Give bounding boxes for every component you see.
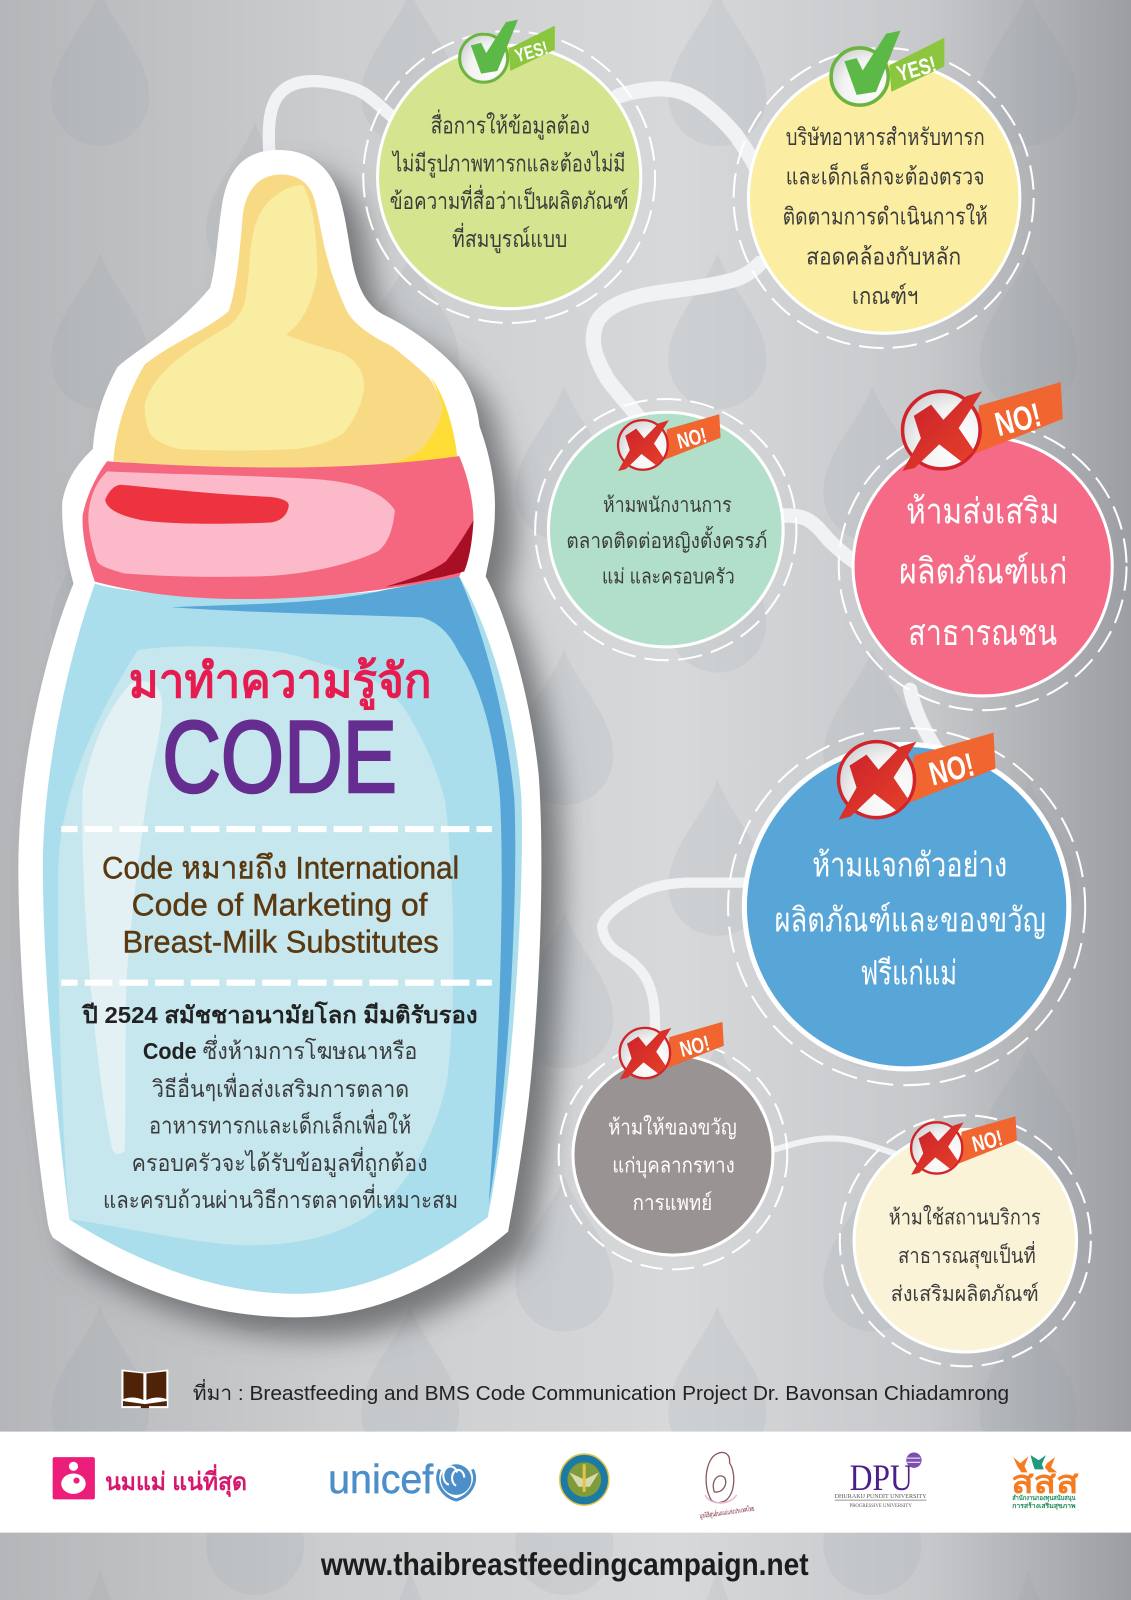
logo: mother and child foundation: มูลนิธิศูนย์นมแม่แห่งประเทศไทย [699,1504,755,1520]
text: yellow circle: และเด็กเล็กจะต้องตรวจ [786,162,985,190]
logo band [0,1432,1131,1533]
text: green circle: ข้อความที่สื่อว่าเป็นผลิตภัณฑ์ [390,184,629,214]
icon: no badge: NO! [677,1030,712,1062]
history text: Code ซึ่งห้ามการโฆษณาหรือ [143,1034,417,1064]
icon: book [121,1369,168,1408]
teat [113,175,457,471]
logo: DPU: PROGRESSIVE UNIVERSITY [850,1503,912,1509]
icon: no badge [903,382,1063,471]
logo: DPU: DHURAKIJ PUNDIT UNIVERSITY [835,1493,927,1500]
history text: และครบถ้วนผ่านวิธีการตลาดที่เหมาะสม [103,1183,458,1213]
logo: ThaiHealth: สำนักงานกองทุนสนับสนุน [1012,1494,1076,1502]
collar shade [386,520,473,587]
bottle white streak [82,681,162,1154]
text: cream circle: สาธารณสุขเป็นที่ [898,1241,1036,1269]
panel: blue circle [728,728,1085,1085]
dashed dividers [61,829,492,983]
definition text: Code of Marketing of [132,886,428,922]
definition text: Breast-Milk Substitutes [122,924,439,960]
text: yellow circle: สอดคล้องกับหลัก [806,243,961,269]
collar highlight [88,471,395,577]
teat light area [145,185,364,451]
bottle inner highlight [58,646,453,1245]
logo: ThaiHealth: สสส [1011,1463,1079,1500]
text: green circle: ไม่มีรูปภาพทารกและต้องไม่มี [391,150,625,178]
text: yellow circle [783,124,988,309]
panel: teal circle [535,399,796,660]
collar [83,456,473,599]
text: green circle: สื่อการให้ข้อมูลต้อง [431,109,590,141]
bottle body [43,577,522,1294]
text: teal circle: แม่ และครอบครัว [602,566,735,589]
text: yellow circle: ติดตามการดำเนินการให้ [783,204,988,230]
panel: cream circle [840,1115,1091,1366]
text: blue circle [774,848,1046,993]
icon: yes badge: YES! [512,37,550,66]
text: grey circle: ห้ามให้ของขวัญ [608,1115,737,1140]
history text [81,1001,478,1213]
main title: มาทำความรู้จัก [129,655,432,711]
icon: no badge: NO! [970,1125,1005,1157]
text: teal circle: ตลาดติดต่อหญิงตั้งครรภ์ [566,526,767,553]
logo: ThaiHealth [1011,1455,1079,1510]
bottle shadow [39,170,562,1338]
collar red bar [105,485,289,524]
icon: no badge: NO! [991,397,1045,444]
icon: no badge: NO! [925,746,978,792]
logo: mother and child foundation [699,1452,755,1520]
connector path between bottle and circles [269,81,937,1154]
history text: ปี 2524 สมัชชาอนามัยโลก มีมติรับรอง [81,1001,478,1028]
logo: breastfeeding campaign: นมแม่ แน่ที่สุด [105,1464,247,1498]
logo: ministry seal [560,1454,609,1505]
icon: no badge [911,1116,1017,1175]
bottle [18,150,562,1338]
text: pink circle: ผลิตภัณฑ์แก่ [899,552,1067,592]
logo: unicef: unicef [328,1456,434,1502]
logo: DPU: DPU [850,1457,913,1498]
bottle right dark stripe [171,577,515,1204]
logo: breastfeeding campaign [53,1457,247,1499]
text: pink circle [899,491,1067,653]
text: green circle: ที่สมบูรณ์แบบ [452,222,567,254]
icon: yes badge: YES! [894,51,939,86]
history text: ครอบครัวจะได้รับข้อมูลที่ถูกต้อง [132,1146,428,1178]
text: pink circle: ห้ามส่งเสริม [906,491,1059,531]
text: yellow circle: บริษัทอาหารสำหรับทารก [786,124,985,150]
text: pink circle: สาธารณชน [908,613,1057,653]
teat bright edge [357,378,457,469]
source credit: ที่มา : Breastfeeding and BMS Code Communication Project Dr. Bavonsan Chiadamrong [193,1379,1009,1405]
text: teal circle [566,494,767,589]
panel: grey circle [559,1022,787,1269]
bottle white outline [18,150,541,1317]
definition text [102,850,459,960]
text: grey circle [608,1115,737,1215]
history text: วิธีอื่นๆเพื่อส่งเสริมการตลาด [152,1072,409,1102]
text: cream circle: ส่งเสริมผลิตภัณฑ์ [891,1282,1039,1306]
panel: pink circle [839,382,1127,710]
icon: no badge [839,733,996,820]
history text: อาหารทารกและเด็กเล็กเพื่อให้ [149,1109,411,1139]
icon: no badge [620,1022,724,1080]
panel: green circle [363,20,655,323]
definition text: Code หมายถึง International [102,850,459,886]
logo: DPU [835,1453,927,1509]
text: grey circle: การแพทย์ [633,1191,712,1215]
text: green circle [390,109,629,254]
icon: yes badge [831,31,944,105]
text: blue circle: ห้ามแจกตัวอย่าง [812,848,1007,885]
icon: no badge: NO! [675,422,709,454]
text: grey circle: แก่บุคลากรทาง [612,1153,735,1178]
text: cream circle [889,1204,1041,1306]
logo: ThaiHealth: การสร้างเสริมสุขภาพ [1012,1501,1076,1510]
text: yellow circle: เกณฑ์ฯ [852,283,918,309]
CODE heading: CODE [162,700,397,814]
text: teal circle: ห้ามพนักงานการ [603,494,732,517]
panel: yellow circle [734,31,1034,348]
icon: no badge [618,414,721,471]
text: blue circle: ผลิตภัณฑ์และของขวัญ [774,902,1046,940]
icon: yes badge [460,20,555,82]
text: blue circle: ฟรีแก่แม่ [860,956,957,993]
website url: www.thaibreastfeedingcampaign.net [320,1546,809,1582]
text: cream circle: ห้ามใช้สถานบริการ [889,1204,1041,1229]
